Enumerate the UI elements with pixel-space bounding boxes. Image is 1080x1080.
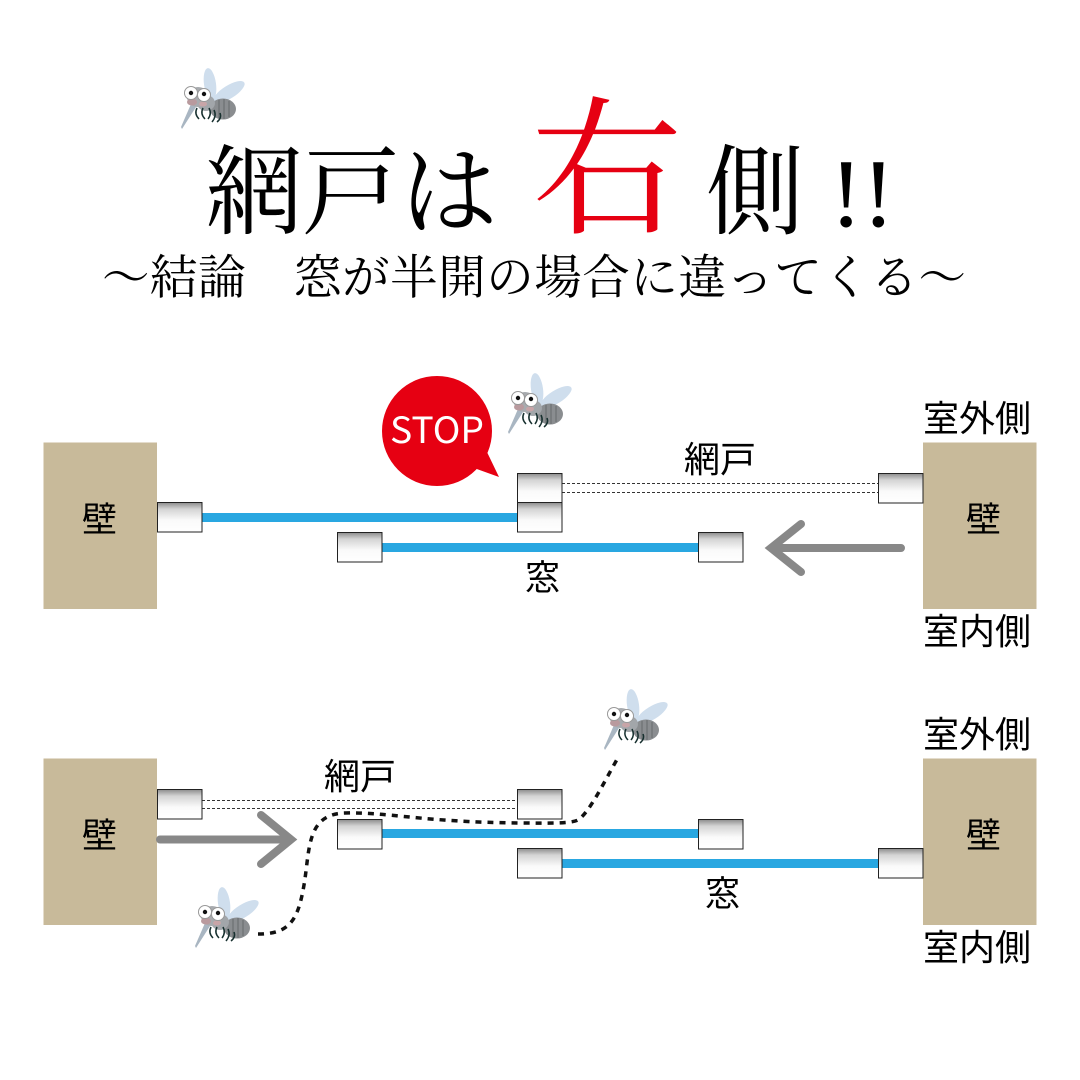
title: 側 bbox=[706, 140, 804, 248]
icon: mosquito stopped bbox=[508, 372, 575, 434]
right wall bbox=[923, 442, 1036, 609]
title bbox=[205, 89, 895, 255]
right wall: 壁 bbox=[966, 501, 1001, 540]
screen frame bar bbox=[202, 513, 518, 522]
mosquito flight path dotted bbox=[258, 756, 619, 934]
right wall bbox=[923, 758, 1036, 925]
title: 網戸は bbox=[205, 140, 498, 248]
icon: mosquito bottom bbox=[195, 886, 262, 948]
title: !! bbox=[830, 140, 895, 247]
window glass bar bbox=[382, 543, 698, 552]
callout: STOP: STOP bbox=[390, 402, 484, 454]
label: outdoor side: 室外側 bbox=[923, 398, 1031, 439]
left wall bbox=[44, 758, 157, 925]
label: indoor side: 室内側 bbox=[923, 611, 1031, 652]
callout: STOP bbox=[382, 376, 499, 486]
label: indoor side: 室内側 bbox=[923, 927, 1031, 968]
panel: top diagram, screen on the right stops the mosquito bbox=[44, 372, 1036, 652]
label: outdoor side: 室外側 bbox=[923, 714, 1031, 755]
frame boxes bbox=[158, 790, 923, 878]
icon: mosquito top bbox=[604, 688, 671, 750]
screen mesh dotted bbox=[562, 484, 878, 492]
label: window: 窓 bbox=[525, 559, 560, 598]
left wall: 壁 bbox=[82, 817, 117, 856]
label: screen: 網戸 bbox=[684, 439, 756, 480]
icon: mosquito by title bbox=[181, 67, 248, 129]
subtitle: ～結論 窓が半開の場合に違ってくる～ bbox=[102, 253, 966, 305]
screen mesh dotted bbox=[202, 800, 518, 808]
title: 右 bbox=[532, 89, 682, 255]
left wall: 壁 bbox=[82, 501, 117, 540]
window glass bars bbox=[382, 829, 878, 868]
label: screen: 網戸 bbox=[324, 756, 396, 797]
right wall: 壁 bbox=[966, 817, 1001, 856]
left wall bbox=[44, 442, 157, 609]
panel: bottom diagram, screen on the left lets the mosquito through bbox=[44, 688, 1036, 968]
label: window: 窓 bbox=[705, 875, 740, 914]
arrow: window slides left bbox=[771, 524, 901, 572]
frame boxes bbox=[158, 474, 923, 562]
arrow: window slides right bbox=[160, 815, 291, 864]
